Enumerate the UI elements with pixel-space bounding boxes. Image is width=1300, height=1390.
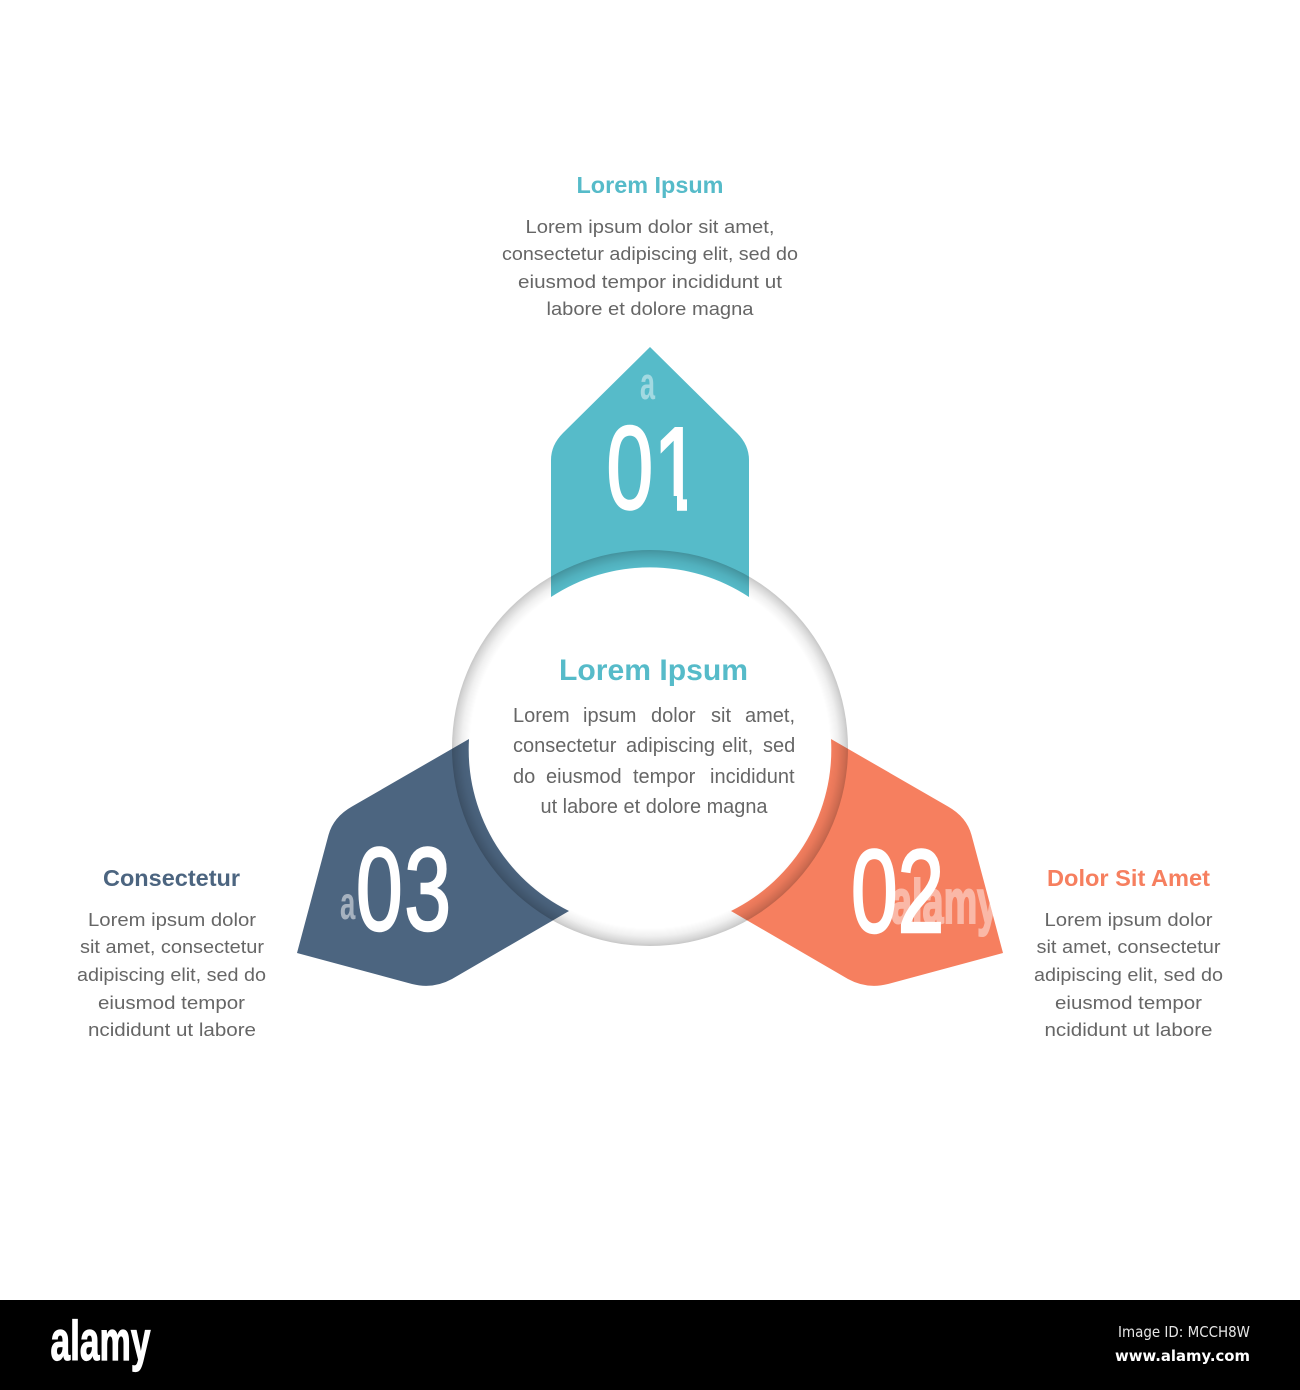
watermark: letter a on teal arrow: a [640, 358, 655, 409]
text block: top body: Lorem ipsum dolor sit amet, [526, 216, 774, 237]
heading: left: Consectetur [103, 865, 240, 891]
text block: centre body: tempor [633, 766, 696, 788]
text block: left body: sit amet, consectetur [80, 936, 264, 957]
text block: top body: consectetur adipiscing elit, sed do [502, 243, 798, 264]
circle: centre ring with shadow [452, 550, 848, 946]
text block: centre body: dolor [651, 705, 696, 727]
footer text: website: www.alamy.com [1115, 1347, 1250, 1365]
text block: left body: eiusmod tempor [98, 992, 245, 1013]
text block: top body: labore et dolore magna [546, 298, 754, 319]
text block: centre body: adipiscing [626, 735, 715, 757]
panel: left text block [77, 865, 266, 1040]
watermark: letter a on navy arrow: a [340, 879, 356, 930]
heading: centre: Lorem Ipsum [559, 654, 748, 687]
text block: left body [77, 909, 266, 1040]
text block: right body [1034, 909, 1223, 1040]
text block: centre body: amet, [745, 705, 795, 727]
panel: centre text block [513, 654, 795, 818]
number: 01: 1 [654, 402, 700, 535]
text block: centre body [513, 705, 795, 818]
panel: right text block [1034, 865, 1223, 1040]
text block: centre body: do [513, 766, 535, 788]
text block: top body [502, 216, 798, 319]
text block: left body: Lorem ipsum dolor [88, 909, 256, 930]
arrow: teal step 01 [551, 347, 749, 597]
text block: top body: eiusmod tempor incididunt ut [518, 271, 782, 292]
text block: centre body: Lorem [513, 705, 570, 727]
heading: top: Lorem Ipsum [576, 172, 724, 198]
text block: centre body: consectetur [513, 735, 617, 757]
text block: centre body: eiusmod [546, 766, 622, 788]
text block: right body: eiusmod tempor [1055, 992, 1202, 1013]
text block: centre body: incididunt [710, 766, 795, 788]
text block: centre body: sit [711, 705, 731, 727]
text block: right body: sit amet, consectetur [1036, 936, 1220, 957]
footer bar [0, 1300, 1300, 1390]
text block: left body: ncididunt ut labore [88, 1019, 256, 1040]
text block: centre body: ut labore et dolore magna [540, 796, 768, 818]
text block: centre body: elit, [722, 735, 753, 757]
heading: right: Dolor Sit Amet [1047, 865, 1210, 891]
text block: centre body: sed [763, 735, 795, 757]
text block: right body: adipiscing elit, sed do [1034, 964, 1223, 985]
watermark: alamy on orange arrow: alamy [891, 867, 999, 936]
arrow: navy step 03 [297, 739, 569, 986]
number: 01: 0 [606, 401, 653, 534]
text block: left body: adipiscing elit, sed do [77, 964, 266, 985]
footer logo: alamy: alamy [50, 1309, 150, 1372]
footer text: image id: Image ID: MCCH8W [1118, 1323, 1250, 1341]
number: 01 [608, 424, 687, 511]
number: 03: 03 [356, 823, 453, 955]
number: 02: 02 [851, 825, 944, 957]
text block: right body: Lorem ipsum dolor [1044, 909, 1212, 930]
text block: centre body: ipsum [583, 705, 636, 727]
panel: top text block [502, 172, 798, 319]
text block: right body: ncididunt ut labore [1044, 1019, 1212, 1040]
arrow: orange step 02 [731, 739, 1003, 986]
